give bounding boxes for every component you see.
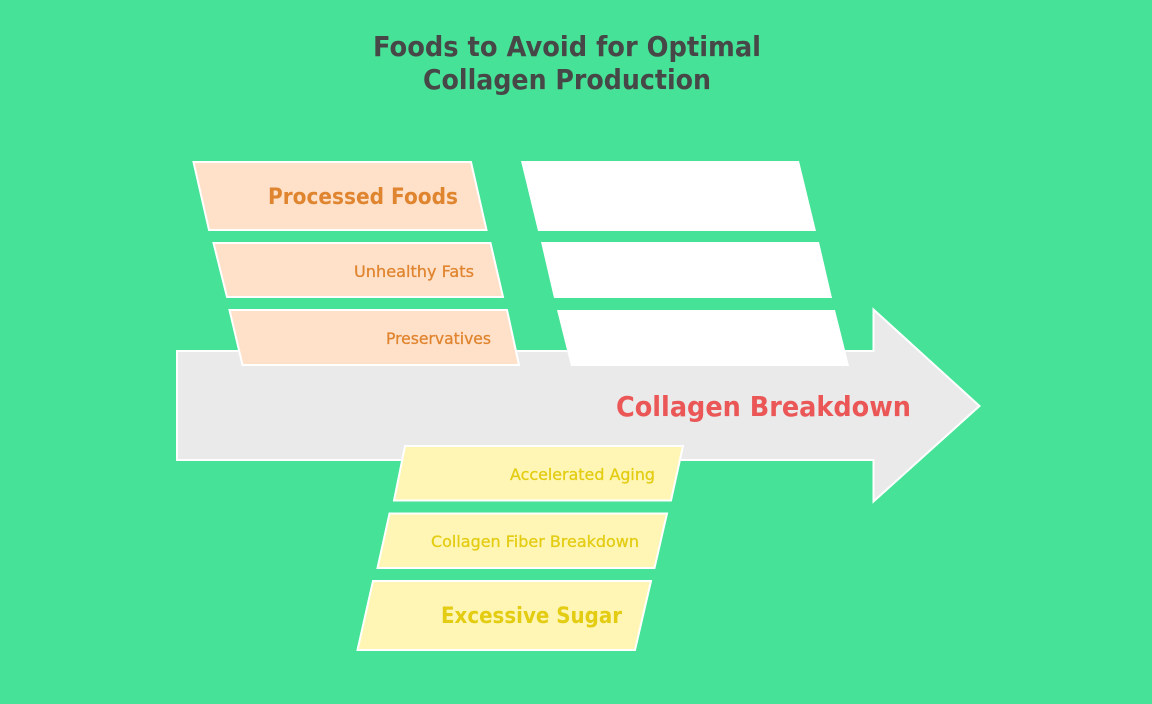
panel: preservatives: [230, 310, 519, 365]
panel: blank lower box: [557, 310, 849, 366]
panel: preservatives: Preservatives: [386, 329, 491, 348]
title: Collagen Production: [423, 63, 711, 96]
arrow: collagen breakdown spine: [177, 310, 980, 502]
arrow label: Collagen Breakdown: [616, 390, 911, 423]
panel: processed foods: Processed Foods: [268, 185, 458, 210]
panel: blank top box: [521, 161, 816, 231]
panel: collagen fiber breakdown: [378, 514, 667, 568]
panel: blank middle box: [541, 242, 832, 298]
panel: processed foods: [194, 162, 486, 230]
title: [373, 30, 761, 96]
title: Foods to Avoid for Optimal: [373, 30, 761, 63]
panel: accelerated aging: Accelerated Aging: [510, 465, 655, 484]
panel: collagen fiber breakdown: Collagen Fiber Breakdown: [431, 532, 639, 551]
panel: unhealthy fats: Unhealthy Fats: [354, 262, 474, 281]
panel: excessive sugar: [358, 581, 651, 650]
panel: excessive sugar: Excessive Sugar: [441, 604, 622, 629]
panel: accelerated aging: [394, 446, 683, 500]
panel: unhealthy fats: [214, 243, 503, 297]
